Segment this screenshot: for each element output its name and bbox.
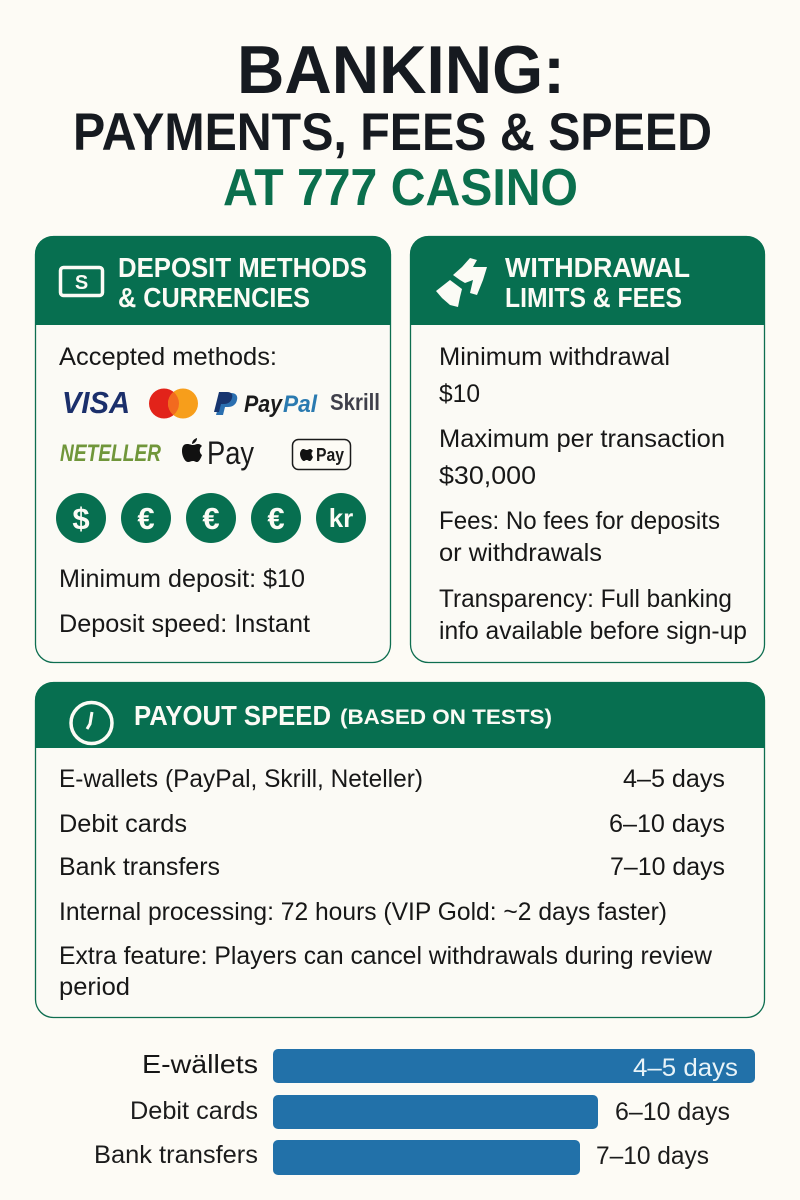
deposit panel heading: & CURRENCIES <box>118 282 310 313</box>
logo: Apple Pay <box>182 435 254 471</box>
panel: payout speed <box>35 682 765 1018</box>
logo: Mastercard <box>149 388 198 418</box>
bar: e-wallets <box>142 1049 755 1083</box>
payout row: bank transfers: Bank transfers <box>59 853 220 881</box>
currency badges: € <box>137 501 155 536</box>
bar: debit cards: 6–10 days <box>615 1098 730 1126</box>
withdrawal panel heading: LIMITS & FEES <box>505 282 682 313</box>
logo: Apple Pay badge: Pay <box>316 445 344 465</box>
logo: PayPal <box>214 391 318 418</box>
minimum deposit: Minimum deposit: $10 <box>59 565 305 593</box>
payout row: e-wallets <box>59 765 725 793</box>
bar: debit cards: Debit cards <box>130 1097 258 1125</box>
deposit speed: Deposit speed: Instant <box>59 610 310 638</box>
deposit panel heading <box>118 252 367 313</box>
deposit panel header <box>35 236 391 325</box>
transparency: info available before sign-up <box>439 617 747 645</box>
bar: e-wallets: E-wällets <box>142 1049 258 1079</box>
payout row: debit cards: 6–10 days <box>609 810 725 838</box>
fees: or withdrawals <box>439 539 602 567</box>
logo: Visa: VISA <box>62 385 130 420</box>
logo: Apple Pay: Pay <box>207 435 254 471</box>
payout row: debit cards <box>59 810 725 838</box>
icon: banknote <box>60 268 102 296</box>
deposit panel heading: DEPOSIT METHODS <box>118 252 367 283</box>
logo: PayPal: Pay <box>244 391 283 418</box>
accepted methods label: Accepted methods: <box>59 343 277 371</box>
bar: bank transfers <box>94 1140 709 1175</box>
transparency: Transparency: Full banking <box>439 585 732 613</box>
title <box>73 32 712 217</box>
payout row: e-wallets: 4–5 days <box>623 765 725 793</box>
extra feature: period <box>59 973 130 1001</box>
maximum per transaction: Maximum per transaction <box>439 425 725 453</box>
payout row: e-wallets: E-wallets (PayPal, Skrill, Neteller) <box>59 765 423 793</box>
bar: e-wallets: 4–5 days <box>633 1054 738 1082</box>
payout panel heading: (BASED ON TESTS) <box>340 706 552 729</box>
logo: PayPal: Pal <box>283 391 318 418</box>
title: AT 777 CASINO <box>223 159 578 217</box>
currency badges: $ <box>72 501 90 536</box>
bar chart: payout speed <box>94 1049 755 1175</box>
currency badges <box>56 493 366 543</box>
transparency <box>439 585 747 645</box>
payout row: bank transfers: 7–10 days <box>610 853 725 881</box>
logo: Neteller: NETELLER <box>60 440 162 467</box>
icon: banknote: S <box>75 272 88 294</box>
logo: Apple Pay badge <box>292 440 350 470</box>
fees <box>439 507 720 567</box>
logo: Skrill: Skrill <box>330 389 380 415</box>
panel: deposit methods and currencies <box>35 236 391 662</box>
minimum withdrawal: Minimum withdrawal <box>439 343 670 371</box>
extra feature: Extra feature: Players can cancel withdrawals during review <box>59 942 713 970</box>
internal processing: Internal processing: 72 hours (VIP Gold: ~2 days faster) <box>59 898 667 926</box>
payout panel heading: PAYOUT SPEED <box>134 700 331 731</box>
payout panel header <box>35 682 765 748</box>
icon: withdrawal brush <box>436 258 487 307</box>
title: BANKING: <box>237 32 565 108</box>
maximum per transaction: $30,000 <box>439 462 536 490</box>
currency badges: kr <box>329 503 353 533</box>
bar: debit cards <box>130 1095 730 1129</box>
payout panel heading <box>134 700 552 731</box>
withdrawal panel heading: WITHDRAWAL <box>505 252 690 283</box>
withdrawal panel heading <box>505 252 690 313</box>
minimum withdrawal <box>439 343 670 408</box>
bar: bank transfers: Bank transfers <box>94 1141 258 1169</box>
payout row: bank transfers <box>59 853 725 881</box>
payout row: debit cards: Debit cards <box>59 810 187 838</box>
withdrawal panel header <box>410 236 765 325</box>
icon: clock <box>71 702 112 744</box>
currency badges: € <box>202 501 220 536</box>
title: PAYMENTS, FEES & SPEED <box>73 103 712 162</box>
panel: withdrawal limits and fees <box>410 236 765 662</box>
extra feature <box>59 942 713 1001</box>
bar: bank transfers: 7–10 days <box>596 1142 709 1170</box>
minimum withdrawal: $10 <box>439 380 480 408</box>
fees: Fees: No fees for deposits <box>439 507 720 535</box>
currency badges: € <box>267 501 285 536</box>
maximum per transaction <box>439 425 725 490</box>
